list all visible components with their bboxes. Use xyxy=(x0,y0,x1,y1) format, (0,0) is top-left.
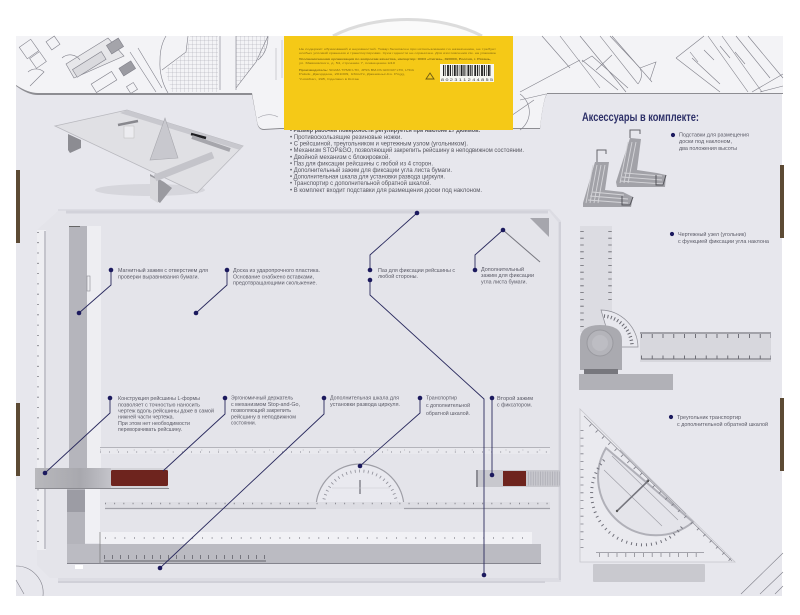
feature list xyxy=(290,126,524,194)
callout: additional scale xyxy=(158,396,400,570)
callout: second clamp: с фиксатором. xyxy=(497,402,532,408)
feature list: • Двойной механизм с блокировкой. xyxy=(290,153,390,161)
callout: L-shaped bar: позволяет с точностью наносить xyxy=(118,402,200,408)
carrying straps right xyxy=(780,165,784,471)
callout: board material xyxy=(194,268,320,315)
accessory note: stands: два положения высоты xyxy=(679,146,737,152)
blueprint: floor plan xyxy=(19,36,162,94)
callout: ergonomic holder: рейсшину в неподвижном xyxy=(231,414,296,420)
callout: second clamp: Второй зажим xyxy=(497,395,533,402)
callout: board material: Доска из ударопрочного пластика. xyxy=(233,268,320,274)
callout: magnetic clamp: Магнитный зажим с отверстием для xyxy=(118,267,208,274)
callout: additional scale: Дополнительная шкала для xyxy=(330,396,399,402)
callout: ergonomic holder xyxy=(163,394,300,471)
label fine print xyxy=(299,47,497,81)
L-shaped parallel bar vertical xyxy=(67,226,101,545)
feature list: • Дополнительная шкала для установки развода циркуля. xyxy=(290,174,445,180)
callout: ergonomic holder: Эргономичный держатель xyxy=(231,394,293,402)
callout: ergonomic holder: позволяющий закрепить xyxy=(231,407,291,414)
lower parallel ruler xyxy=(105,502,550,509)
label fine print: Уполномоченная организация по вопросам качества, импортёр: ООО «Сигма», 390000, Россия, г. Рязань, xyxy=(299,57,491,61)
accessory note: drawing head: с функцией фиксации угла наклона xyxy=(678,238,769,245)
accessory note: stands xyxy=(671,132,749,152)
feature list: • В комплект входит подставки для размещения доски под наклоном. xyxy=(290,187,482,194)
feature list: • Паз для фиксации рейсшины с любой из 4 сторон. xyxy=(290,160,433,168)
callout: magnetic clamp xyxy=(77,267,208,315)
callout: additional scale: установки развода циркуля. xyxy=(330,402,400,408)
board shadow edge xyxy=(58,209,561,582)
yellow product label xyxy=(284,36,513,130)
right clamp xyxy=(476,470,560,487)
callout: extra corner clamp: зажим для фиксации xyxy=(481,273,534,279)
accessories heading: Аксессуары в комплекте: xyxy=(582,112,699,124)
blueprint: slanted technical drawing xyxy=(508,36,783,130)
callout leader: groove to bottom edge xyxy=(368,278,486,577)
callout: board material: предотвращающими скольжение. xyxy=(233,280,317,286)
callout: L-shaped bar: нижней части чертежа. xyxy=(118,414,174,420)
callout: protractor xyxy=(358,396,470,468)
bottom scale ruler xyxy=(67,532,541,569)
upper parallel ruler xyxy=(100,447,550,454)
panel: drawing board xyxy=(35,211,560,582)
feature list: • Размер рабочей поверхности регулируется при наклоне 27 дюймов. xyxy=(290,126,480,134)
protractor xyxy=(316,464,404,508)
carrying straps left xyxy=(16,170,20,476)
label fine print: Не содержит образований и неровностей. Товар безопасен при использовании по назначению, не требует xyxy=(299,47,497,51)
left ruler xyxy=(37,230,46,550)
callout: extra corner clamp: угла листа бумаги. xyxy=(481,280,527,286)
plastic handle xyxy=(333,20,482,36)
accessory note: drawing head xyxy=(670,231,769,245)
label fine print: Yunwhan, 198, Сделано в Китае xyxy=(299,77,360,81)
barcode: 8 0 2 3 1 1 2 4 4 8 5 5 xyxy=(441,78,493,82)
callout: L-shaped bar: переворачивать рейсшину. xyxy=(118,426,182,433)
callout: extra corner clamp: Дополнительный xyxy=(481,266,524,273)
callout: protractor: обратной шкалой. xyxy=(426,410,470,417)
callout: protractor: с дополнительной xyxy=(426,402,470,409)
callout: L-shaped bar xyxy=(43,395,214,475)
callout: magnetic clamp: проверки выравнивания бумаги. xyxy=(118,274,199,280)
blueprint: circular part xyxy=(160,36,282,118)
accessory note: triangle xyxy=(669,415,768,428)
label fine print: особых условий хранения и транспортировки. Срок годности не ограничен. Для изготовления см. на упаковке xyxy=(299,51,497,55)
rail handle xyxy=(35,468,169,489)
feature list: • С рейсшиной, треугольником и чертежным узлом (угольником). xyxy=(290,140,468,148)
accessory note: triangle: с дополнительной обратной шкалой xyxy=(677,421,768,428)
feature list: • Дополнительный зажим для фиксации угла листа бумаги. xyxy=(290,166,452,174)
callout: ergonomic holder: состоянии. xyxy=(231,420,256,426)
corner clamp xyxy=(530,218,549,237)
callout: second clamp xyxy=(490,395,533,477)
callout: extra corner clamp xyxy=(473,228,534,286)
barcode xyxy=(440,64,494,82)
callout: groove for parallel bar xyxy=(368,211,455,280)
callout: groove for parallel bar: Паз для фиксации рейсшины с xyxy=(378,267,455,274)
callout: ergonomic holder: с механизмом Stop-and-Go, xyxy=(231,402,300,408)
feature list: • Противоскользящие резиновые ножки. xyxy=(290,134,402,141)
grey clamp strip xyxy=(503,230,540,262)
feature list: • Механизм STOP&GO, позволяющий закрепить рейсшину в неподвижном состоянии. xyxy=(290,146,524,154)
icon: drawing head angle tool xyxy=(579,226,771,390)
icon: stands xyxy=(583,130,666,207)
icon: triangle protractor xyxy=(580,409,735,582)
callout: board material: Основание снабжено вставками, xyxy=(233,274,314,280)
accessory note: stands: доски под наклоном, xyxy=(679,139,732,145)
accessory note: drawing head: Чертежный узел (угольник) xyxy=(678,231,746,238)
accessory note: stands: Подставки для размещения xyxy=(679,132,749,138)
feature list: • Транспортир с дополнительной обратной шкалой. xyxy=(290,179,431,187)
callout: L-shaped bar: Конструкция рейсшины L-формы xyxy=(118,395,200,402)
label fine print: Pokok, Джордаон, 201009, Ichinchi, Дженяньс-Ко. Pngg, xyxy=(299,72,405,76)
blueprint corner lines xyxy=(16,553,783,596)
callout: L-shaped bar: чертеж вдоль рейсшины даже в самой xyxy=(118,408,214,414)
product photo: board on stands xyxy=(55,110,243,203)
icon: recycle triangle xyxy=(426,73,434,79)
accessory note: triangle: Треугольник транспортир xyxy=(677,415,741,421)
flap with blueprint drawings xyxy=(16,36,783,130)
callout: groove for parallel bar: любой стороны. xyxy=(378,273,418,280)
callout: L-shaped bar: При этом нет необходимости xyxy=(118,421,190,427)
label fine print: Производитель: SIGMA TPMD LTD, JPSS BM-PA GROUP LTD, LTDA xyxy=(299,68,414,72)
label fine print: ул. Маяковского, д. 54, строение 7, помещение Н10 xyxy=(299,61,396,65)
callout: protractor: Транспортир xyxy=(426,396,457,402)
